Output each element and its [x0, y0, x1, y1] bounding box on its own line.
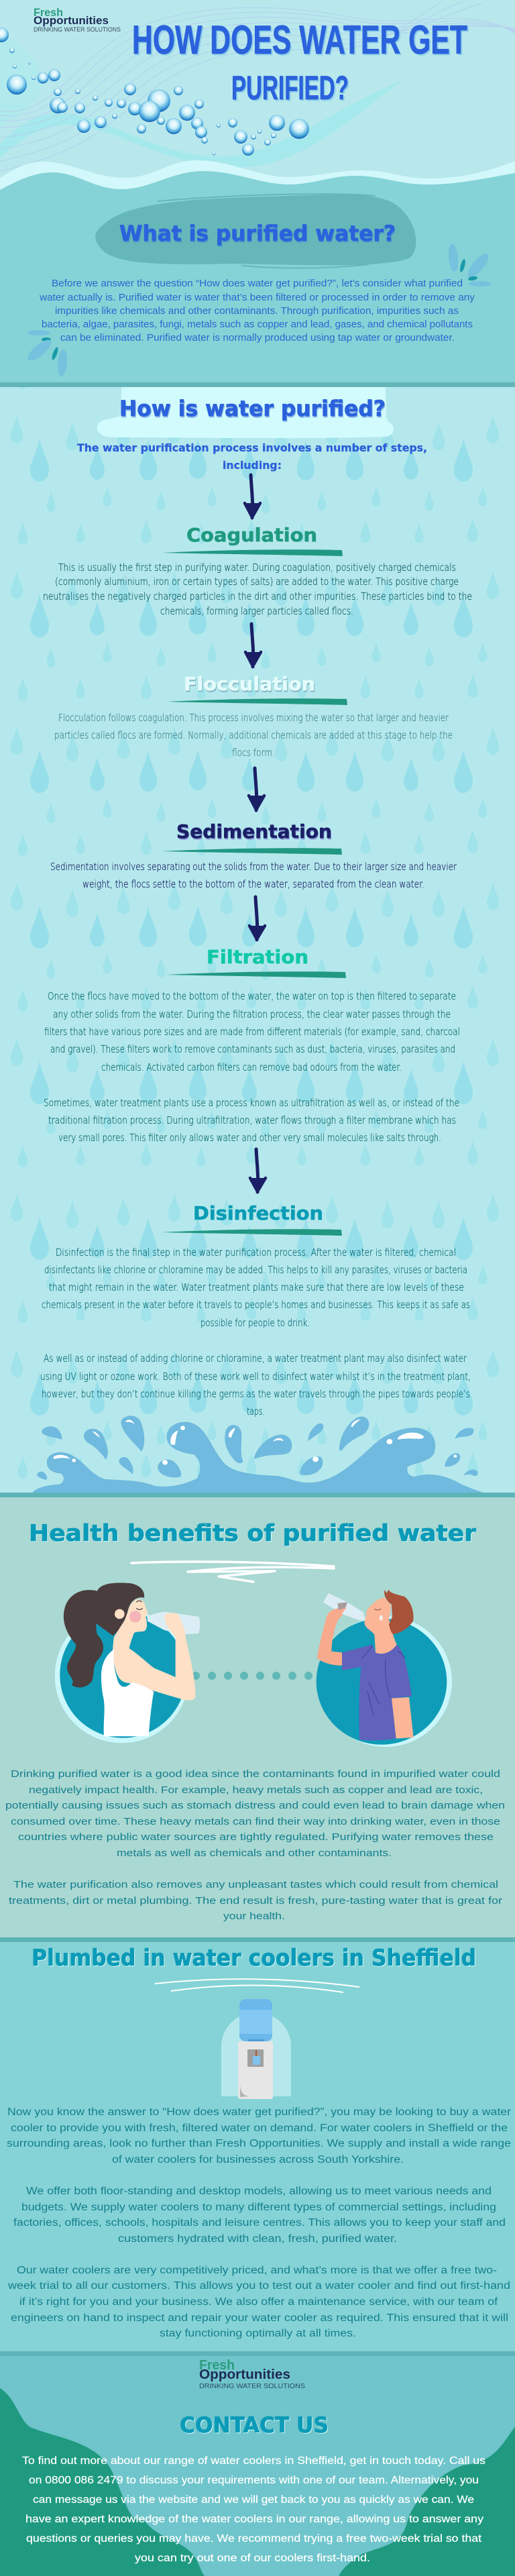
underline: [162, 1229, 342, 1236]
text: plumbed in water coolers: Our water coolers are very competitively priced, and what’s more is that we offer a free two-: [17, 2265, 497, 2276]
text: disinfection: [40, 1246, 471, 1417]
underline: [162, 848, 342, 855]
text: health benefits: The water purification also removes any unpleasant tastes which could result from chemical: [13, 1879, 498, 1890]
text: flocculation: [54, 712, 453, 759]
panel: health benefits: [0, 1493, 515, 1937]
text: disinfection: taps.: [247, 1405, 265, 1417]
text: plumbed in water coolers: engineers on hand to inspect and repair your water cooler as required. This ensured that it will: [11, 2312, 508, 2324]
arrow 5: [250, 1149, 266, 1192]
illustration: water cooler: [221, 1999, 291, 2099]
text: plumbed in water coolers: We offer both floor-standing and desktop models, allowing us to meet various needs and: [26, 2186, 492, 2197]
illustration: woman drinking: [55, 1582, 200, 1743]
text: plumbed in water coolers: stay functioning optimally at all times.: [160, 2328, 356, 2339]
text: plumbed in water coolers: budgets. We supply water coolers to many different types of commercial settings, including: [21, 2202, 496, 2213]
text: health benefits: [5, 1768, 505, 1922]
arrow 3: [249, 768, 264, 810]
text: plumbed in water coolers: if it’s right for you and your business. We also offer a maintenance service, with our team of: [19, 2296, 498, 2308]
step heading: disinfection: Disinfection: [193, 1202, 323, 1224]
text: coagulation: [43, 561, 472, 617]
logo: Fresh Opportunities: Fresh: [34, 6, 63, 19]
curved lines: [155, 1979, 359, 1992]
text: health benefits: negatively impact health. For example, heavy metals such as copper and lead are toxic,: [29, 1784, 483, 1796]
icon: splash accents bottom left: [25, 330, 68, 377]
heading: plumbed in water coolers: Plumbed in water coolers in Sheffield: [32, 1945, 476, 1972]
heading blob: [95, 194, 416, 268]
heading: health benefits: Health benefits of purified water: [29, 1520, 476, 1547]
logo: Fresh Opportunities: [34, 6, 121, 33]
heading: contact us: CONTACT US: [180, 2412, 329, 2438]
text: plumbed in water coolers: surrounding areas, look no further than Fresh Opportunities. We supply and install a wide range: [7, 2138, 511, 2149]
text: plumbed in water coolers: [7, 2106, 511, 2339]
subheading: The water purification process involves a number of steps,: [77, 441, 427, 454]
step heading: filtration: Filtration: [207, 946, 308, 968]
text: health benefits: potentially causing issues such as stomach distress and could even lead to brain damage when: [5, 1800, 505, 1811]
text: filtration: [44, 990, 460, 1144]
step heading: flocculation: Flocculation: [184, 673, 315, 695]
intro text: impurities like chemicals and other contaminants. Through purification, impurities such as: [55, 306, 459, 317]
text: plumbed in water coolers: cooler to provide you with fresh, filtered water on demand. For water coolers in Sheffield or the: [11, 2123, 508, 2134]
text: contact: To find out more about our range of water coolers in Sheffield, get in touch today. Call us: [22, 2455, 485, 2467]
text: filtration: chemicals. Activated carbon filters can remove bad odours from the water.: [101, 1061, 402, 1073]
panel: plumbed in water coolers: [0, 1937, 515, 2351]
arrow 4: [249, 897, 265, 940]
text: health benefits: consumed over time. These heavy metals can find their way into drinking water, even in those: [11, 1816, 500, 1827]
intro text: can be eliminated. Purified water is normally produced using tap water or groundwater.: [60, 333, 455, 343]
illustration: water splash: [33, 1415, 483, 1493]
decoration: flowing lines and ribbon: [0, 1, 515, 171]
text: contact: [22, 2455, 485, 2564]
intro text: [39, 278, 475, 343]
text: plumbed in water coolers: of water coolers for businesses across South Yorkshire.: [112, 2154, 404, 2165]
text: sedimentation: [50, 861, 457, 890]
intro text: bacteria, algae, parasites, fungi, metals such as copper and lead, gases, and chemical pollutants: [42, 319, 473, 330]
step heading: sedimentation: Sedimentation: [176, 820, 332, 843]
title: PURIFIED?: [231, 69, 349, 107]
text: plumbed in water coolers: Now you know the answer to “How does water get purified?”, you may be looking to buy a water: [7, 2106, 511, 2118]
green shape left: [0, 2388, 205, 2576]
logo: Fresh Opportunities: DRINKING WATER SOLUTIONS: [34, 26, 121, 33]
text: contact: can message us via the website and we will get back to you as quickly as we can. We: [33, 2494, 474, 2506]
text: contact: on 0800 086 2479 to discuss your requirements with one of our team. Alternatively, you: [29, 2475, 479, 2486]
intro text: water actually is. Purified water is water that’s been filtered or processed in order to remove any: [39, 292, 475, 303]
heading brush: [97, 387, 394, 438]
panel: contact us: [0, 2351, 515, 2576]
scribble: [131, 1562, 334, 1582]
logo: Fresh Opportunities footer: Opportunities: [199, 2367, 290, 2382]
water bubbles: [0, 28, 309, 156]
text: health benefits: Drinking purified water is a good idea since the contaminants found in impurified water could: [11, 1768, 500, 1780]
logo: Fresh Opportunities footer: [199, 2358, 305, 2390]
text: contact: have an expert knowledge of the water coolers in our range, allowing us to answer any: [25, 2514, 483, 2525]
text: plumbed in water coolers: week trial to all our customers. This allows you to test out a water cooler and find out first-hand: [7, 2280, 510, 2292]
step heading: coagulation: Coagulation: [186, 524, 317, 546]
text: health benefits: countries where public water sources are tightly regulated. Purifying water removes these: [18, 1831, 494, 1843]
icon: splash accents top right: [447, 243, 492, 286]
text: contact: questions or queries you may have. We recommend trying a free two-week trial so that: [26, 2533, 482, 2544]
text: sedimentation: weight, the flocs settle to the bottom of the water, separated from the clean water.: [82, 878, 424, 890]
section: header background: [0, 0, 515, 201]
arrow 1: [245, 475, 260, 518]
text: health benefits: your health.: [223, 1911, 285, 1922]
text: health benefits: treatments, dirt or metal plumbing. The end result is fresh, pure-tasting water that is great for: [9, 1895, 502, 1907]
text: health benefits: metals as well as chemicals and other contaminants.: [117, 1847, 392, 1859]
green shape right: [339, 2426, 515, 2576]
panel: what is purified water: [0, 194, 515, 382]
illustration: man drinking: [317, 1589, 452, 1747]
underline: [166, 971, 346, 978]
subheading: including:: [223, 459, 282, 472]
dotted connector: [192, 1672, 312, 1680]
heading: what is purified water: What is purified water?: [119, 221, 396, 246]
panel: how is water purified: [0, 382, 515, 1493]
text: disinfection: possible for people to drink.: [201, 1317, 310, 1329]
text: plumbed in water coolers: factories, offices, schools, hospitals and leisure centres. This allows you to keep your staff and: [13, 2217, 506, 2229]
logo: Fresh Opportunities footer: Fresh: [199, 2358, 235, 2373]
logo: Fresh Opportunities: Opportunities: [34, 14, 109, 27]
subheading: [77, 441, 427, 472]
logo: Fresh Opportunities footer: DRINKING WATER SOLUTIONS: [199, 2382, 305, 2390]
text: plumbed in water coolers: customers hydrated with clean, fresh, purified water.: [118, 2233, 397, 2245]
heading: how is water purified: How is water purified?: [119, 396, 386, 421]
text: flocculation: flocs form.: [232, 747, 275, 759]
arrow 2: [245, 624, 261, 667]
intro text: Before we answer the question “How does water get purified?”, let’s consider what purified: [52, 278, 463, 289]
text: contact: you can try out one of our coolers first-hand.: [135, 2553, 370, 2564]
underline: [163, 549, 343, 556]
underline: [168, 698, 347, 705]
text: coagulation: chemicals, forming larger particles called flocs.: [160, 605, 353, 617]
title: [132, 17, 467, 107]
wave divider: [0, 160, 515, 201]
